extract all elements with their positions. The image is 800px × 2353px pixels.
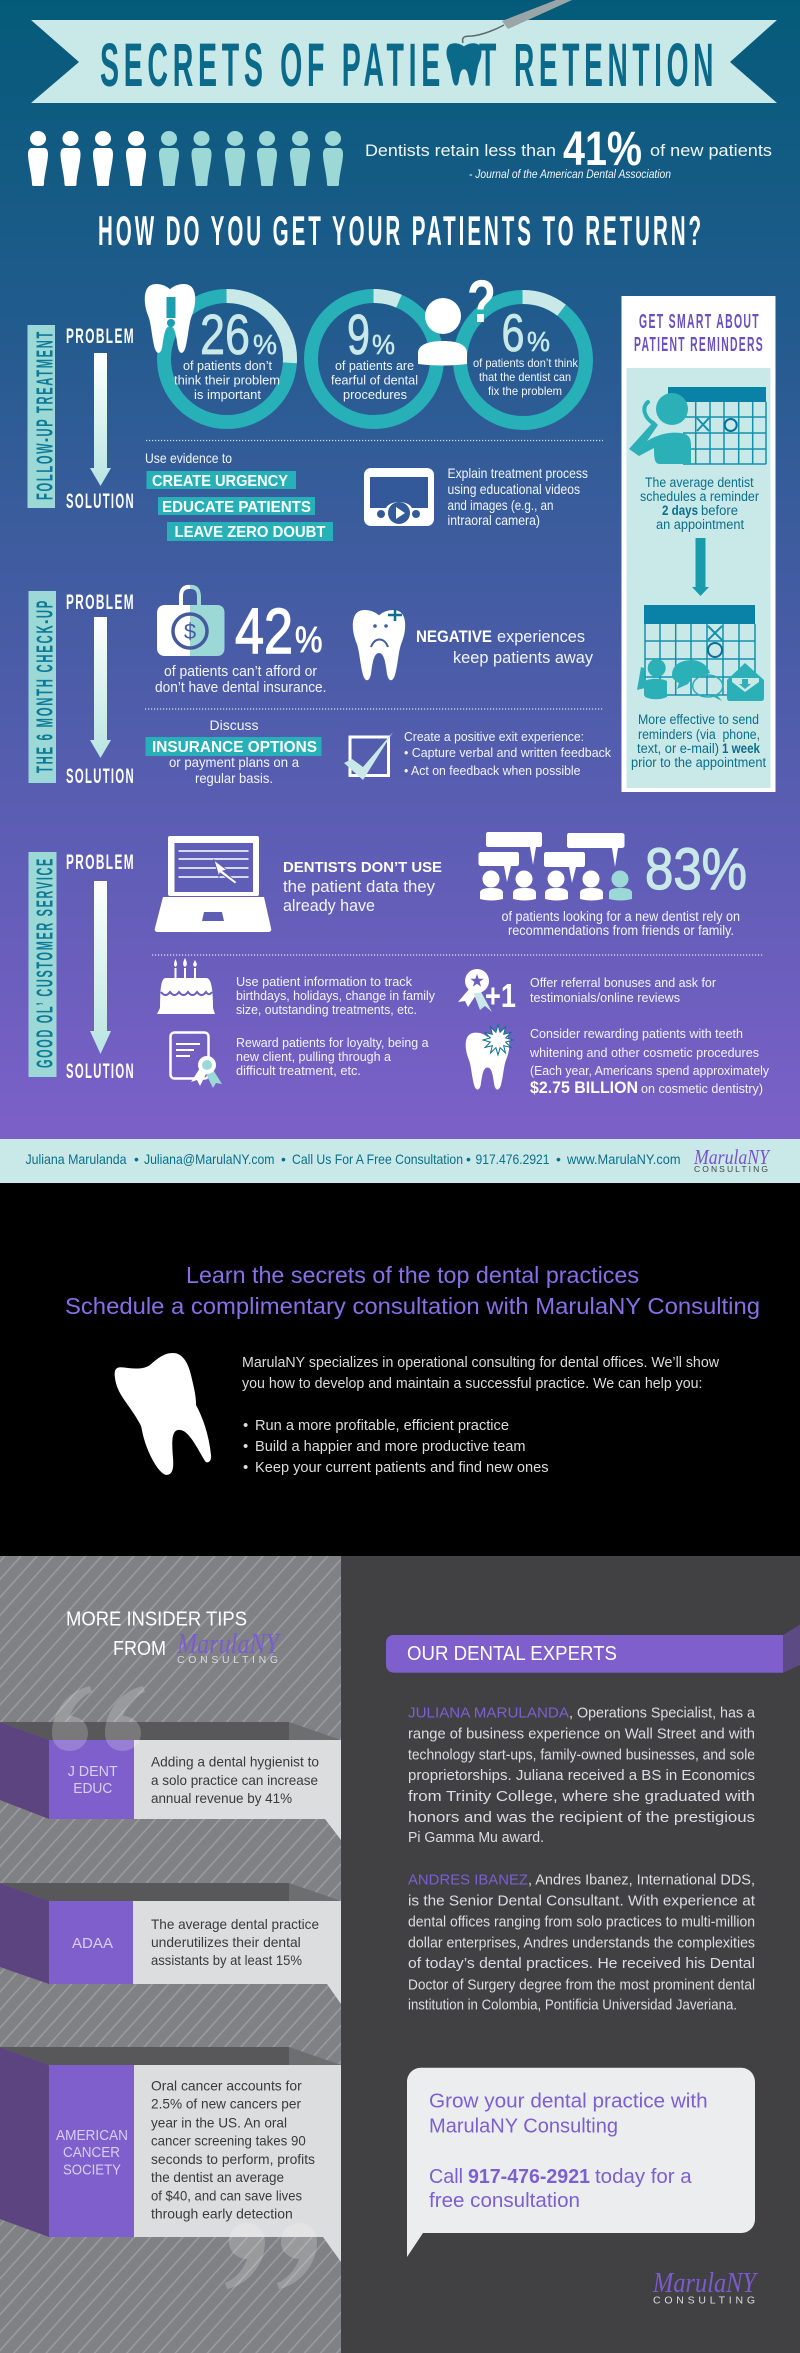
ribbon: J Dent Educ tip: a solo practice can increase (151, 1772, 318, 1788)
text: dentists don't use (283, 859, 442, 915)
stat: 83% (502, 837, 747, 938)
text: patient information: birthdays, holidays, change in family (236, 988, 435, 1003)
stat: 42%: don’t have dental insurance. (155, 679, 326, 696)
panel: our dental experts (341, 1556, 800, 2353)
section: follow-up treatment: FOLLOW-UP TREATMENT (32, 330, 58, 500)
icon: birthday cake (157, 958, 215, 1014)
title banner (31, 0, 777, 103)
ribbon: ADAA tip: assistants by at least 15% (151, 1952, 302, 1968)
ribbon: J Dent Educ tip: Adding a dental hygienist to (151, 1754, 319, 1770)
tag: educate patients: EDUCATE PATIENTS (162, 499, 311, 516)
banner ribbon (31, 20, 777, 103)
text: 2 days before (640, 475, 759, 532)
side label (28, 591, 58, 783)
text: dentists don't use: the patient data they (283, 878, 436, 896)
donut: 26%: is important (194, 387, 261, 402)
bio: Juliana Marulanda: , Operations Specialist, has a (569, 1705, 756, 1721)
arrow problem to solution (90, 881, 111, 1054)
donut: 6%: of patients don’t think (473, 356, 579, 370)
callout: grow your practice: Call (429, 2166, 463, 2188)
text: reward patients (236, 1035, 429, 1078)
solution text: use evidence: Use evidence to (145, 450, 232, 466)
text: consulting description: • (243, 1438, 248, 1455)
dotted divider (146, 440, 603, 442)
footer contact band: • (556, 1151, 561, 1167)
bio: Juliana Marulanda: Pi Gamma Mu award. (408, 1830, 544, 1846)
stat: 42%: 42 (235, 595, 293, 667)
callout: grow your practice (407, 2068, 755, 2257)
arrow problem to solution (90, 617, 111, 758)
ribbon: J Dent Educ tip (0, 1722, 341, 1840)
donut: 6%: 6 (502, 304, 524, 363)
title text: T (479, 31, 501, 99)
bio: Andres Ibanez: of today’s dental practices. He received his Dental (408, 1956, 755, 1972)
text: 1 week prior: 1 week (722, 741, 760, 756)
logo: MarulaNY: CONSULTING (653, 2295, 755, 2307)
bio: Juliana Marulanda: JULIANA MARULANDA (408, 1705, 569, 1721)
icon: tooth with sparkle (466, 1025, 513, 1090)
text: positive exit experience: • Act on feedback when possible (404, 763, 580, 778)
solution text: insurance options (146, 717, 322, 786)
icon: certificate (170, 1032, 222, 1088)
solution text: insurance options: INSURANCE OPTIONS (152, 739, 317, 756)
ribbon: ADAA tip: ADAA (72, 1935, 113, 1952)
ribbon: American Cancer Society tip (0, 2047, 341, 2262)
section: the 6 month check-up (28, 585, 611, 788)
problem label: PROBLEM (66, 591, 135, 614)
donut: 6%: that the dentist can (479, 370, 571, 384)
donut: 9%: of patients are (335, 358, 414, 373)
footer contact band: www.MarulaNY.com (566, 1151, 680, 1167)
icon: tooth with exclamation (145, 284, 195, 353)
ribbon: ADAA tip: underutilizes their dental (151, 1934, 301, 1950)
bio: Andres Ibanez: ANDRES IBANEZ (408, 1873, 528, 1889)
statistic: 41% retention: 41% (563, 123, 642, 176)
icon: tooth replacing letter N (447, 43, 481, 86)
statistic: 41% retention: Dentists retain less than (365, 141, 556, 160)
solution text: insurance options: Discuss (209, 717, 259, 733)
logo: MarulaNY: CONSULTING (694, 1164, 768, 1174)
text: explain treatment process: Explain treatment process (448, 465, 588, 481)
ribbon: American Cancer Society tip: CANCER (63, 2144, 120, 2161)
footer contact band: Juliana@MarulaNY.com (144, 1151, 274, 1167)
logo: MarulaNY: MarulaNY (652, 2267, 758, 2299)
ribbon: ADAA tip (0, 1883, 341, 2004)
bio: Andres Ibanez: dental offices ranging from solo practices to multi-million (408, 1915, 755, 1931)
donut: 26%: of patients don’t (183, 358, 272, 373)
bio: Andres Ibanez: Doctor of Surgery degree from the most prominent dental (408, 1978, 755, 1994)
text: negative experiences: NEGATIVE (416, 627, 492, 646)
stat: 42% (155, 595, 326, 696)
donut: 9% (311, 296, 437, 422)
heading: more insider tips: FROM (113, 1638, 166, 1660)
text: reward patients: new client, pulling through a (236, 1049, 392, 1064)
ribbon: American Cancer Society tip: SOCIETY (63, 2162, 121, 2178)
ribbon: J Dent Educ tip: J DENT (68, 1763, 118, 1780)
donut: 6%: fix the problem (488, 384, 562, 398)
ribbon: American Cancer Society tip: AMERICAN (56, 2127, 128, 2144)
donut: 6%: % (527, 326, 550, 357)
stat: 83%: recommendations from friends or family. (508, 923, 734, 938)
donut: 26% (164, 296, 290, 422)
bio: Juliana Marulanda: range of business experience on Wall Street and with (408, 1726, 755, 1742)
dotted divider (145, 708, 603, 710)
callout: grow your practice: Grow your dental practice with (429, 2091, 708, 2113)
side label (28, 325, 58, 508)
icon: checkbox (344, 732, 393, 780)
arrow problem to solution (90, 353, 111, 486)
ribbon: American Cancer Society tip: 2.5% of new cancers per (151, 2096, 301, 2112)
heading: more insider tips (66, 1608, 247, 1660)
heading: learn the secrets (65, 1262, 760, 1319)
bio: Juliana Marulanda (408, 1705, 756, 1846)
text: referral bonuses (530, 975, 717, 1005)
statistic: 41% retention (365, 123, 772, 181)
text: dentists don't use: DENTISTS DON’T USE (283, 859, 442, 876)
callout: grow your practice: today for a (595, 2166, 693, 2188)
icon: person with question mark: ? (467, 268, 496, 335)
footer contact band: Call Us For A Free Consultation (292, 1151, 463, 1167)
text: patient information: size, outstanding treatments, etc. (236, 1002, 417, 1017)
text: negative experiences: keep patients away (453, 648, 593, 667)
text: positive exit experience: • Capture verbal and written feedback (404, 745, 611, 760)
text: consulting description: • (243, 1417, 248, 1434)
icon: calendar with phoning dentist (629, 387, 766, 464)
icon: money bag (157, 585, 224, 656)
text: cosmetic procedures: Consider rewarding patients with teeth (530, 1026, 743, 1041)
logo: MarulaNY: CONSULTING (177, 1654, 278, 1666)
icon: medal plus one: +1 (485, 977, 516, 1014)
solution text: insurance options: regular basis. (195, 770, 273, 786)
ribbon: American Cancer Society tip: year in the US. An oral (151, 2114, 287, 2130)
panel heading (634, 311, 764, 356)
icon: money bag: $ (184, 619, 196, 644)
text: consulting description: Keep your current patients and find new ones (255, 1459, 548, 1476)
text: consulting description: Run a more profitable, efficient practice (255, 1417, 509, 1434)
solution label: SOLUTION (66, 1060, 135, 1083)
ribbon heading: our dental experts (386, 1624, 800, 1673)
donut: 9%: procedures (343, 387, 407, 402)
quote mark: opening (52, 1686, 145, 1751)
icon: medal plus one (458, 969, 516, 1014)
ribbon: American Cancer Society tip: Oral cancer accounts for (151, 2078, 302, 2094)
text: 1 week prior: More effective to send (638, 712, 759, 727)
section: good ol' customer service: GOOD OL’ CUSTOMER SERVICE (32, 857, 58, 1068)
panel: more insider tips (0, 1556, 341, 2353)
stat: 83%: of patients looking for a new dentist rely on (502, 909, 740, 924)
text: 2 days before: schedules a reminder (640, 489, 759, 504)
donut: 9%: % (372, 329, 395, 360)
callout: grow your practice: MarulaNY Consulting (429, 2116, 618, 2138)
stat: 42%: of patients can’t afford or (164, 663, 317, 680)
ribbon: J Dent Educ tip: EDUC (73, 1780, 112, 1797)
footer contact band: 917.476.2921 (476, 1151, 550, 1167)
stat: 42%: % (295, 619, 322, 660)
panel: patient reminders (622, 296, 776, 792)
text: positive exit experience (404, 729, 611, 778)
ribbon: American Cancer Society tip: through early detection (151, 2206, 293, 2222)
solution text: use evidence (145, 450, 333, 541)
text: cosmetic procedures: (Each year, Americans spend approximately (530, 1063, 769, 1078)
solution label: SOLUTION (66, 765, 135, 788)
ribbon: American Cancer Society tip: seconds to perform, profits (151, 2151, 315, 2167)
icon: people with speech bubbles (478, 832, 632, 900)
bio: Andres Ibanez: is the Senior Dental Consultant. With experience at (408, 1894, 755, 1910)
bio: Andres Ibanez: institution in Colombia, Pontificia Universidad Javeriana. (408, 1998, 737, 2014)
icon: large white tooth (115, 1353, 211, 1475)
donut: 9%: 9 (347, 303, 370, 367)
icon: sad tooth (353, 609, 405, 680)
text: dentists don't use: already have (283, 897, 375, 915)
people pictogram: 4 of 10 white (28, 131, 343, 186)
icon: person with question mark (418, 268, 496, 366)
stat: 83%: 83% (645, 837, 747, 902)
text: patient information (236, 974, 435, 1017)
text: consulting description: • (243, 1459, 248, 1476)
footer contact band: Juliana Marulanda (26, 1151, 127, 1167)
statistic: 41% retention: - Journal of the American Dental Association (469, 169, 671, 181)
text: positive exit experience: Create a positive exit experience: (404, 729, 584, 744)
callout: grow your practice: free consultation (429, 2190, 580, 2212)
bio: Andres Ibanez: , Andres Ibanez, International DDS, (528, 1873, 755, 1889)
text: consulting description: MarulaNY specializes in operational consulting for dental offices. We’ll show (242, 1354, 719, 1371)
black consultation section (0, 1183, 800, 1556)
text: 1 week prior: reminders (via phone, (638, 727, 760, 742)
text: cosmetic procedures: whitening and other cosmetic procedures (529, 1045, 759, 1060)
tag: create urgency: CREATE URGENCY (152, 473, 289, 490)
text: 2 days before: 2 days (662, 503, 698, 518)
donut: 26%: 26 (200, 303, 250, 367)
logo: MarulaNY: MarulaNY (693, 1145, 771, 1169)
statistic: 41% retention: of new patients (650, 141, 772, 160)
text: patient information: Use patient information to track (236, 974, 412, 989)
donut: 26%: think their problem (174, 372, 280, 388)
problem label: PROBLEM (66, 325, 135, 348)
text: cosmetic procedures: $2.75 BILLION (530, 1078, 638, 1097)
text: 1 week prior (631, 712, 766, 770)
bio: Juliana Marulanda: technology start-ups, family-owned businesses, and sole (408, 1747, 755, 1763)
donut: 26%: % (253, 329, 277, 360)
bio: Juliana Marulanda: proprietorships. Juliana received a BS in Economics (408, 1768, 755, 1784)
text: consulting description: Build a happier and more productive team (255, 1438, 526, 1455)
footer contact band (0, 1139, 800, 1183)
heading: more insider tips: MORE INSIDER TIPS (66, 1608, 247, 1630)
ribbon: American Cancer Society tip: the dentist an average (151, 2169, 284, 2185)
tag: leave zero doubt: LEAVE ZERO DOUBT (174, 524, 326, 541)
side label (28, 852, 58, 1077)
donut: 6% (460, 297, 586, 423)
footer contact band: • (466, 1151, 471, 1167)
icon: video tablet (364, 468, 434, 526)
footer contact band: • (134, 1151, 139, 1167)
text: 2 days before: before (701, 503, 738, 518)
ribbon heading: our dental experts: OUR DENTAL EXPERTS (407, 1643, 617, 1665)
solution label: SOLUTION (66, 490, 135, 513)
text: reward patients: Reward patients for loyalty, being a (236, 1035, 429, 1050)
solution text: insurance options: or payment plans on a (169, 754, 299, 770)
text: 2 days before: an appointment (656, 517, 744, 532)
text: 1 week prior: prior to the appointment (631, 755, 766, 770)
quote mark: closing (225, 2223, 317, 2289)
heading: learn the secrets: Learn the secrets of the top dental practices (186, 1262, 639, 1288)
problem label: PROBLEM (66, 851, 135, 874)
side label: THE 6 MONTH CHECK-UP (32, 599, 58, 773)
icon: calendar with communication channels (637, 605, 764, 701)
bio: Andres Ibanez: dollar enterprises, Andres understands the complexities (408, 1936, 755, 1952)
ribbon: ADAA tip: The average dental practice (151, 1916, 319, 1932)
dotted divider (152, 954, 764, 956)
ribbon: American Cancer Society tip: cancer screening takes 90 (151, 2132, 306, 2148)
text: 1 week prior: text, or e-mail) (637, 741, 719, 756)
section: good ol' customer service (28, 832, 769, 1097)
section: follow-up treatment (28, 268, 603, 541)
logo: MarulaNY: MarulaNY (176, 1628, 281, 1660)
text: explain treatment process (448, 465, 588, 528)
ribbon: J Dent Educ tip: annual revenue by 41% (151, 1790, 292, 1806)
bio: Andres Ibanez (408, 1873, 755, 2014)
text: referral bonuses: testimonials/online reviews (530, 990, 680, 1005)
text: consulting description (242, 1354, 719, 1476)
text: explain treatment process: using educational videos (448, 481, 580, 497)
text: cosmetic procedures (529, 1026, 769, 1097)
icon: dental probe (463, 0, 572, 43)
bio: Juliana Marulanda: from Trinity College, where she graduated with (408, 1789, 755, 1805)
callout: grow your practice: 917-476-2921 (468, 2166, 590, 2188)
donut: 9%: fearful of dental (331, 372, 418, 388)
text: referral bonuses: Offer referral bonuses and ask for (530, 975, 717, 990)
text: explain treatment process: intraoral camera) (448, 512, 540, 528)
text: negative experiences: experiences (497, 627, 585, 646)
text: 2 days before: The average dentist (645, 475, 754, 490)
background: gradient poster (0, 0, 800, 1139)
text: reward patients: difficult treatment, etc. (236, 1063, 361, 1078)
footer contact band: • (281, 1151, 286, 1167)
text: negative experiences (416, 627, 593, 667)
text: cosmetic procedures: on cosmetic dentistry) (641, 1081, 763, 1096)
arrow down (692, 538, 709, 596)
icon: laptop (155, 836, 271, 932)
heading: learn the secrets: Schedule a complimentary consultation with MarulaNY Consulting (65, 1293, 760, 1319)
ribbon: American Cancer Society tip: of $40, and can save lives (151, 2187, 302, 2203)
text: consulting description: you how to develop and maintain a successful practice. We can help you: (242, 1375, 702, 1392)
text: explain treatment process: and images (e.g., an (448, 497, 554, 513)
bio: Juliana Marulanda: honors and was the recipient of the prestigious (408, 1810, 755, 1826)
